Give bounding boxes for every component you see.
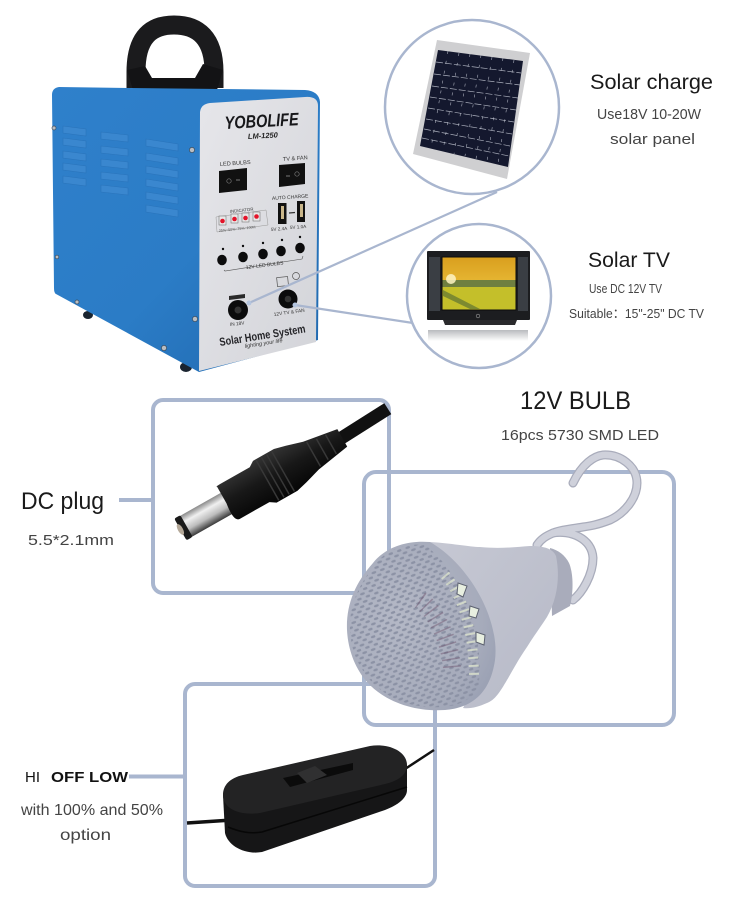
- text: plug size: 5.5*2.1mm: [28, 532, 114, 549]
- icon: solar panel: [413, 40, 530, 179]
- connector: DC plug label to frame: [119, 498, 152, 502]
- battery indicator: INDICATOR: [230, 207, 254, 214]
- switch labels: AUTO CHARGE: [272, 193, 309, 202]
- heading: 12V bulb: 12V BULB: [520, 387, 631, 415]
- connector line: TV port to TV circle: [292, 302, 413, 323]
- heading: DC plug: DC plug: [21, 488, 104, 515]
- heading: switch positions: OFF LOW: [51, 769, 129, 786]
- text: LED count: 16pcs 5730 SMD LED: [501, 427, 659, 444]
- bulb port bracket and label: [224, 256, 303, 271]
- product tagline: lighting your life: [244, 338, 283, 350]
- bulb lens: [347, 542, 496, 710]
- panel: TV circle: [407, 224, 551, 368]
- feet: [83, 311, 192, 372]
- rocker switch: TV and fan: [279, 163, 305, 187]
- icon: LED bulb: [347, 455, 637, 710]
- solar input port: [228, 294, 248, 328]
- bulb hook: [537, 455, 637, 600]
- battery indicator: 25%~50%~75%~100%: [219, 225, 257, 233]
- panel: solar panel circle: [385, 20, 559, 194]
- carrying handle: [127, 25, 223, 90]
- icon: inline switch: [187, 745, 434, 853]
- blue side panel: [52, 87, 320, 372]
- USB ports: [278, 201, 305, 224]
- 12V LED bulb ports: [217, 236, 305, 265]
- icon: DC plug: [166, 390, 401, 552]
- panel: DC plug frame: [153, 390, 401, 593]
- battery indicator: [216, 207, 268, 233]
- panel: bulb frame: [364, 472, 674, 725]
- product: solar home system unit: [52, 25, 320, 372]
- switch labels: [220, 155, 309, 232]
- text: switch option line 1: with 100% and 50%: [20, 802, 163, 819]
- switch labels: TV & FAN: [283, 155, 308, 163]
- connector: switch label to frame: [129, 774, 183, 778]
- text: TV voltage: Use DC 12V TV: [589, 281, 662, 296]
- bulb shell: [430, 542, 558, 708]
- connector line: solar charge port to solar panel circle: [246, 192, 497, 306]
- solar input port: IN 18V: [230, 320, 246, 328]
- TV and fan port: 12V TV & FAN: [273, 308, 306, 318]
- product label: Solar Home System: [219, 324, 306, 349]
- bulb port bracket and label: 12V LED BULBS: [246, 260, 284, 271]
- icon: television: [427, 251, 530, 341]
- side vents: [63, 126, 178, 217]
- bulb neck: [550, 548, 573, 616]
- heading: solar TV: Solar TV: [588, 249, 670, 272]
- switch labels: LED BULBS: [220, 160, 251, 168]
- text: switch option line 2: option: [60, 827, 111, 844]
- panel: switch frame: [185, 684, 435, 886]
- model number: LM-1250: [248, 130, 279, 141]
- screws: [52, 126, 198, 351]
- switch labels: 5V 1.0A: [290, 224, 307, 230]
- brand name: YOBOLIFE: [224, 109, 300, 133]
- text: solar panel requirement line 2: solar panel: [610, 131, 695, 148]
- text: TV size range: Suitable：15"-25" DC TV: [569, 306, 704, 321]
- TV and fan port: [273, 272, 306, 318]
- text: solar panel requirement line 1: Use18V 10-20W: [597, 106, 702, 123]
- grey front panel: [199, 97, 318, 371]
- heading: solar charge: Solar charge: [590, 71, 713, 94]
- switch labels: 5V 2.4A: [271, 226, 288, 232]
- heading: switch positions: HI: [25, 769, 40, 786]
- rocker switch: LED bulbs: [219, 168, 247, 193]
